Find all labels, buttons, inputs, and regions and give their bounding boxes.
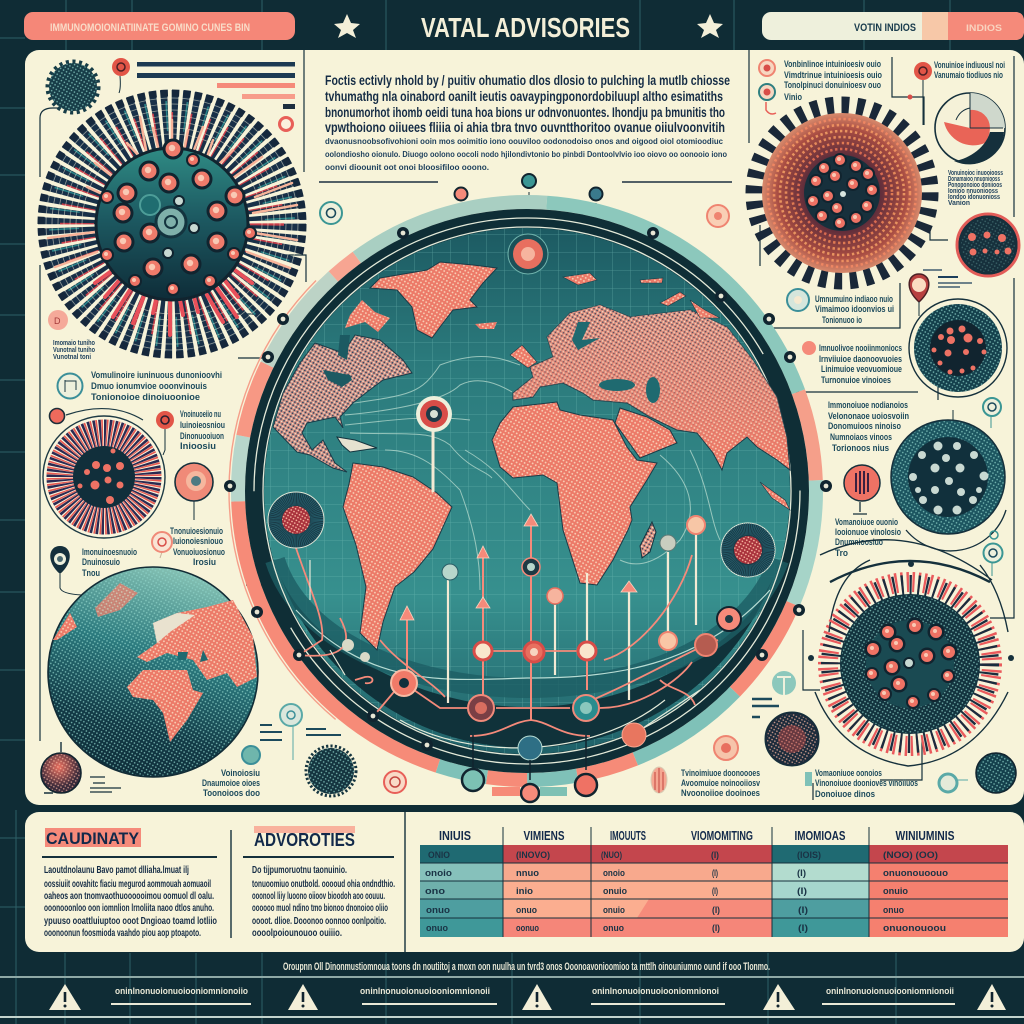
text: mid-right block three [828, 400, 909, 453]
table cells: ONIO [428, 850, 450, 860]
outer ring segments [238, 202, 816, 780]
text: dark pin caption [82, 547, 137, 578]
text: bottom-left labels [202, 768, 260, 798]
table cells: inio [516, 886, 534, 896]
table cells: (I) [798, 905, 808, 915]
header pill: right: VOTIN INDIOS [854, 22, 916, 34]
footer text 4 [822, 986, 955, 1005]
text: small lines bottom left [90, 777, 121, 792]
land: North America [273, 335, 412, 472]
table cells: (I) [712, 868, 718, 878]
node circles [342, 516, 741, 760]
text: top-right block: Vimdtrinue intuinioesis ouio [784, 70, 882, 80]
table cells: (NUO) [601, 850, 622, 860]
text: ring pin caption: Irosiu [193, 557, 216, 567]
data table [420, 827, 1008, 937]
warning triangle 2 [288, 984, 318, 1010]
text: below striped circle [835, 517, 901, 558]
footer text 3 [591, 986, 725, 1005]
footer text 2: oninlnonuoionuoiooniomnionoii [360, 986, 490, 997]
text: left legend: Vunotnal tuniho [53, 347, 95, 354]
table cells: (I) [712, 886, 718, 896]
text: left upper: Vomulinoire iuninuous dunonioovhi [91, 370, 222, 380]
table cells: (I) [712, 923, 720, 933]
warning triangle 3 [522, 984, 552, 1010]
icon: salmon striped circle [844, 465, 880, 514]
text: top-right block: Vinio [784, 92, 802, 102]
footer text 4: oninlnonuoionuoiooniomnionoii [826, 986, 954, 997]
text: left pin caption [180, 409, 225, 451]
virus: small red bottom left [41, 753, 81, 793]
dark lower crescent [273, 553, 781, 748]
table header: IMOMIOAS [794, 828, 846, 843]
intro paragraph: vpwthoiono oiiuees fliiia oi ahia tbra tnvo ouvntthoritoo ovanue oiiulvoonvitih [325, 120, 725, 135]
icon: ring pin [152, 532, 172, 558]
virus: small dark top-left [48, 62, 98, 112]
text: mid-right block two: Imnuolivoe nooiinmoniocs [819, 343, 902, 353]
text: left legend: Vunotnal toni [53, 354, 91, 361]
panel: Caudinaty: ooonoonun foosmioda vaahdo piou aop ptoapoto. [44, 927, 201, 939]
table cells: onuo [603, 923, 624, 933]
text: below striped circle: Dnumnioosiuo [835, 537, 883, 547]
intro paragraph: tvhumathg nla oinabord oanilt ieutis oavaypingponordobiluupl altho esimatiths [325, 89, 723, 104]
header pill: left: IMMUNOMOIONIATIINATE GOMINO CUNES BIN [50, 22, 250, 34]
text: mid-right block two [819, 343, 902, 385]
text: mid-right labels: Vimaimoo idoonvios ui [815, 304, 894, 314]
text: mid-right labels [815, 294, 894, 325]
intro paragraph: Foctis ectivly nhold by / puitiv ohumatio dlos dlosio to pulching la mutlb chiosse [325, 73, 730, 88]
table header: VIMIENS [524, 828, 565, 843]
table header: VIOMOMITING [691, 828, 753, 843]
text: mid-right block two: Irnviiuioe daonoovuoies [819, 354, 902, 364]
text: bottom center-right [681, 768, 760, 798]
table cells: onuonouoou [883, 923, 946, 933]
virus: lower right large [808, 540, 1014, 766]
text: ring pin caption: Tnonuioesionuio [170, 526, 223, 536]
land: Africa [492, 402, 657, 585]
header pill: right: INDIOS [966, 23, 1002, 33]
text: ring pin caption [170, 526, 225, 567]
intro paragraph: bnonumorhot ihomb oeidi tuna hoa bions ur odnvonuontes. Ihondju pa bmunitis tho [325, 105, 725, 120]
panel: Advorotíes [243, 826, 395, 939]
text: gauge caption: Ionioo nnuoniooss [948, 188, 998, 195]
virus: right teal ring [909, 299, 1007, 397]
icon: teal ring right [787, 289, 809, 311]
table cells: oonuo [516, 923, 539, 933]
icon: teardrop bottom [651, 767, 667, 793]
text: left upper: Tonionoioe dinoiuoonioe [91, 392, 200, 402]
icon: left salmon swirl [175, 463, 213, 520]
table cells: (NOO) (OO) [883, 850, 938, 860]
ring pins [224, 227, 832, 751]
text: mid-right block three: Donomuioos ninoiso [828, 421, 901, 431]
text: mid-right block three: Numnoiaos vinoos [830, 432, 892, 442]
land: Arabia [615, 408, 677, 458]
arrow heads [400, 514, 637, 620]
virus insets on globe [268, 492, 775, 577]
text: bottom right [805, 768, 918, 799]
virus: small red dotted right [765, 712, 819, 766]
panel: Advorotíes: Do tijpumoruotnu taonuinio. [252, 864, 347, 876]
text: T badge caption [752, 699, 779, 717]
land: Caribbean [337, 437, 377, 452]
footer text 1 [111, 986, 251, 1005]
text: bottom right: Vinonoiuoe doonioves vinoiiuos [815, 778, 918, 788]
bottom panel [25, 812, 1024, 952]
table cells: (I) [711, 850, 719, 860]
table cells: onoio [425, 868, 453, 878]
table cells: onuo [426, 923, 448, 933]
small globe [48, 567, 258, 777]
icon: teal ring upper right [983, 398, 1001, 428]
icon: salmon ring [280, 118, 292, 130]
panel: Advorotíes: ADVOROTIES [254, 830, 355, 850]
table cells: nnuo [516, 868, 540, 878]
text: gauge caption [948, 170, 1003, 207]
table header: INIUIS [439, 828, 471, 843]
warning triangle 5 [977, 984, 1006, 1010]
text: dark pin caption: Dnuinosuio [82, 557, 120, 567]
footer text 2 [360, 986, 497, 1005]
text: left pin caption: Vnoinuoeiio nu [180, 409, 221, 419]
icon: teal ring bottom-left [280, 704, 302, 760]
ocean current lines [340, 356, 720, 590]
text: bottom center-right: Tvinoimiuoe doonoooes [681, 768, 760, 778]
icon: red teardrop pin right [909, 274, 929, 316]
warning triangle 1 [49, 984, 81, 1010]
panel: Caudinaty [42, 828, 217, 939]
table row fills [420, 845, 1008, 937]
icon: pale salmon circle [48, 310, 68, 330]
text: gauge caption: Vanion [948, 200, 970, 207]
table header: WINIUMINIS [896, 828, 955, 843]
table cells: onoio [603, 868, 625, 878]
icon: top stem of red virus [44, 742, 61, 793]
panel: Advorotíes: ooonool liiy luoono oiioov bioodoh aoo oouuu. [252, 890, 385, 902]
text: mid-right block two: Turnonuioe vinoioes [821, 375, 891, 385]
virus: small teal lower right [976, 753, 1016, 793]
land: South America [343, 463, 452, 650]
text: below striped circle: Tro [835, 548, 848, 558]
table header: IMOUUTS [610, 828, 646, 843]
text: below striped circle: Vomanoiuoe ouonio [835, 517, 898, 527]
virus: large spiked top-left [41, 93, 303, 355]
text: left upper: Dmuo ionumvioe ooonvinouis [91, 381, 207, 391]
icon: salmon dot [802, 341, 816, 355]
icon: top-right red pin [908, 62, 932, 125]
intro paragraph: dvaonusnoobsofivohioni ooin mos ooimitio iono oouviloo oodonodoiso onos and oigood oiol otomioodiuc [325, 137, 724, 146]
land: Madagascar [640, 522, 656, 558]
text: bottom-left ring captions [260, 725, 341, 740]
table cells [425, 850, 949, 933]
text: gauge caption: Iondoo idonuonioss [948, 194, 1000, 201]
virus: right top orange halo [754, 105, 930, 281]
ocean [264, 228, 790, 754]
table cells: onuo [426, 905, 451, 915]
text: mid-right block three: Immonoiuoe nodianoios [828, 400, 908, 410]
table cells: (I) [712, 905, 720, 915]
text: dark pin caption: Imonuinoesnuoio [82, 547, 137, 557]
table cells: (I) [798, 923, 808, 933]
panel: Advorotíes: oooot. dlioe. Dooonoo oonnoo oonlpoitio. [252, 915, 386, 927]
virus: small dark bottom [306, 746, 356, 796]
table cells: onuio [883, 886, 909, 896]
text: left upper [91, 370, 222, 402]
text: below striped circle: Iooionuoe vinolosio [835, 527, 901, 537]
intro paragraph: oonvi dioounit oot onoi bloosifiloo ooono. [325, 163, 489, 172]
text: mid-right labels: Umnumuino indiaoo nuio [815, 294, 893, 304]
panel: Advorotíes: oooolpoiounouoo ouiiio. [252, 927, 342, 939]
text: left pin caption: Dinonuooiuon [180, 431, 224, 441]
text: gauge caption: Ponoponoioo doniioos [948, 182, 1002, 189]
text: gauge caption: Vonuinoioc inuooiooss [948, 170, 1003, 177]
table cells: (I) [797, 886, 807, 896]
text: mid-right block three: Torionoos nius [832, 443, 889, 453]
land: Greenland [370, 262, 497, 338]
icon: pale teal disc [939, 774, 968, 792]
panel: Caudinaty: ooonooonloo oon iomnlion lrnoliita naoo dtlos anuho. [44, 902, 214, 914]
text: top-right block: Tonolpinuci donuinioesv ouo [784, 80, 881, 90]
icon: pale salmon circle: D [54, 316, 61, 326]
intro paragraph [325, 73, 730, 172]
icons: rings above globe [320, 202, 729, 227]
marker: top concentric [508, 234, 548, 274]
table cells: (I) [797, 868, 806, 878]
land: Eurasia [513, 305, 790, 470]
warning triangle 4 [763, 984, 795, 1010]
text: left legend [53, 340, 95, 361]
panel: Caudinaty: CAUDINATY [46, 829, 140, 848]
icon: star right [697, 14, 723, 38]
icon: star left [334, 14, 360, 38]
text: top-right block: Vonbinlinoe intuinioesiv ouio [784, 59, 881, 69]
lines and arrows from bottom [296, 520, 718, 748]
text: bottom right: Donoiuoe dinos [815, 789, 875, 799]
panel connector lines [40, 50, 1014, 800]
land: small islands [510, 273, 790, 510]
icon: salmon ring bottom [714, 736, 738, 760]
text: mid-right block three: Velononaoe uoiosvoiin [828, 411, 909, 421]
footer text 1: oninlnonuoionuoiooniomnionoiio [115, 986, 248, 997]
virus: right pale-node [891, 410, 1006, 551]
icon: left red dot with arc [50, 408, 143, 424]
table header [439, 828, 955, 843]
icon: red pin top-left [112, 58, 130, 93]
panel: Advorotíes: tonuoomiuo onutbold. ooooud ohia ondndthio. [252, 878, 395, 890]
top-left bars [137, 62, 295, 109]
marker: Atlantic concentric [416, 396, 452, 492]
text: top-right block [784, 59, 882, 102]
text: ring pin caption: Iuionoiesniouo [173, 536, 223, 546]
divider [231, 812, 405, 952]
rules under paragraph [319, 181, 732, 183]
text: bottom center-right: Nvoonoiioe dooinoes [681, 788, 760, 798]
icon: salmon ring bottom-centre [384, 771, 406, 793]
text: mid-right block two: Linimuioe veovuomioue [821, 364, 902, 374]
header pill: right [762, 12, 1024, 40]
footer text 3: oninlnonuoionuoiooniomnionoi [592, 986, 719, 997]
text: dark pin caption: Tnou [82, 568, 100, 578]
text: bottom-left labels: Dnaumoioe oioes [202, 778, 260, 788]
icon: left ring [58, 374, 82, 398]
icons: teal S ring [984, 531, 1002, 576]
title: VATAL ADVISORIES [421, 12, 630, 43]
table cells: ono [425, 886, 446, 896]
panel: Caudinaty: ypuuso ooattluiuptoo ooot Dngioao toamd lotliio [44, 915, 217, 927]
panel: Caudinaty: Laoutdnolaunu Bavo pamot dlliaha.lmuat ilj [44, 864, 189, 876]
virus: left radial [43, 416, 165, 538]
table cells: onuo [516, 905, 537, 915]
ring lines [254, 218, 800, 764]
table cells: onuio [603, 905, 625, 915]
panel: Caudinaty: oossiuiit oovahitc fiaciu megurod aommouah aomuaoil [44, 878, 211, 890]
text: mid-right labels: Tonionuoo io [822, 315, 862, 325]
dark bezel [245, 209, 809, 773]
gauge dial [935, 93, 1005, 164]
main globe [224, 193, 832, 802]
intro paragraph: oolondiosho oionulo. Diuogo oolono oocoli nodo hjilondivtonio bo pinbdi Dontoolvlvio ioo oiovo oo oonooio iono [325, 150, 727, 159]
table cells: (INOVO) [516, 850, 550, 860]
text: bottom-left labels: Voinoiosiu [221, 768, 260, 778]
text: bottom right: Vomaoniuoe oonoios [815, 768, 882, 778]
text: bottom center-right: Avoomuioe noinooiiosv [681, 778, 760, 788]
icon: T badge [772, 671, 796, 695]
virus: right small red ring [957, 214, 1019, 276]
panel: Caudinaty: oaheos aon tnomvaothuoooooimou oomuol dl oalu. [44, 890, 214, 902]
text: pin caption [923, 270, 972, 287]
text: top-right lines [934, 60, 1005, 80]
icon: dark teardrop pin [50, 546, 82, 595]
panel: Advorotíes: oooooo muol ndino tmo bionoo dnonoioo oliio [252, 902, 388, 914]
table cells: onuo [883, 905, 904, 915]
icon: pins above globe [454, 174, 602, 216]
text: left pin caption: Inioosiu [180, 441, 216, 451]
table cells: onuio [603, 886, 627, 896]
header pill: left [24, 12, 295, 40]
table cells: (IOIS) [797, 850, 821, 860]
text: left legend: Imomaio tuniho [53, 340, 95, 347]
land: Arctic islands [345, 300, 390, 332]
icons: top-right circles [759, 60, 776, 114]
main panel [25, 50, 1024, 805]
text: left pin caption: Iuinoieosniou [180, 420, 225, 430]
land: Iceland [475, 322, 497, 329]
bottom stems and pins [462, 735, 597, 802]
table cells: onuonouoouo [883, 868, 949, 878]
text: bottom-left labels: Toonoioos doo [203, 788, 260, 798]
icon: teal disc [242, 746, 260, 764]
text: ring pin caption: Vonuoiuosionuo [173, 547, 225, 557]
icon: left red pin [156, 411, 174, 455]
